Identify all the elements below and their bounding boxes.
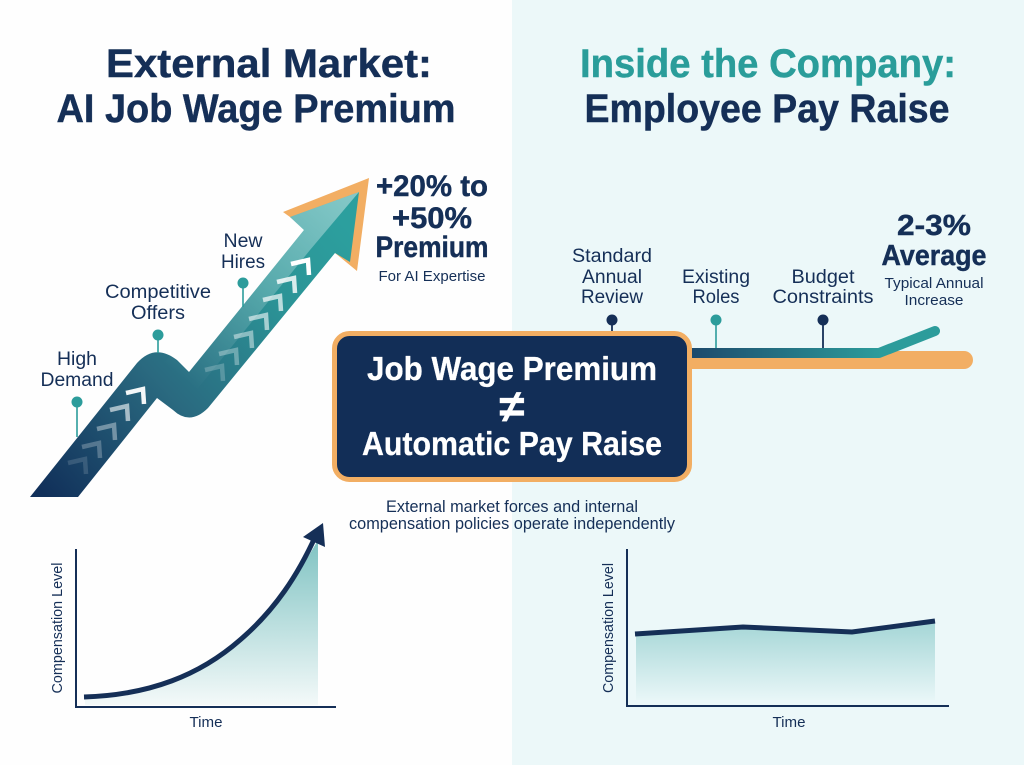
center box: premium is not a raise: Job Wage Premium — [367, 350, 657, 387]
title: external market: External Market: — [106, 42, 432, 86]
panel: inside the company background — [512, 0, 1024, 765]
chart: external compensation curve: Compensation Level — [49, 562, 66, 694]
label: standard annual review: Annual — [582, 267, 642, 288]
callout: premium range: +20% to — [376, 170, 488, 203]
title: inside the company — [580, 42, 956, 131]
title: external market — [56, 42, 456, 131]
callout: premium range: For AI Expertise — [378, 268, 486, 285]
label: standard annual review: Standard — [572, 246, 652, 267]
label: budget constraints — [772, 267, 874, 348]
label: existing roles — [682, 267, 750, 348]
label: standard annual review: Review — [581, 287, 643, 308]
callout: average raise: Average — [882, 240, 986, 272]
center box: premium is not a raise: Automatic Pay Raise — [362, 425, 662, 462]
label: existing roles: Existing — [682, 267, 750, 288]
caption: independent forces: compensation policies operate independently — [349, 515, 676, 533]
label: new hires — [221, 231, 265, 307]
panel: external market background — [0, 0, 512, 765]
label: competitive offers: Offers — [131, 303, 185, 324]
label: new hires: New — [224, 231, 263, 252]
label: high demand — [40, 349, 114, 437]
callout: premium range: +50% — [392, 202, 472, 235]
label: new hires: Hires — [221, 252, 265, 273]
label: existing roles: Roles — [692, 287, 740, 308]
callout: average raise: Typical Annual — [884, 275, 984, 292]
chart: external compensation curve: Time — [190, 715, 222, 731]
chart: internal compensation line: Compensation Level — [600, 563, 617, 693]
label: competitive offers: Competitive — [105, 282, 211, 303]
label: budget constraints: Constraints — [772, 287, 874, 308]
chart: internal compensation line — [600, 549, 949, 731]
callout: average raise — [882, 210, 986, 309]
arrow: rising AI wage premium — [30, 178, 369, 497]
center box: premium is not a raise: ≠ — [499, 380, 525, 432]
title: inside the company: Inside the Company: — [580, 42, 956, 86]
label: high demand: Demand — [40, 370, 114, 391]
callout: premium range: Premium — [376, 231, 488, 264]
title: inside the company: Employee Pay Raise — [584, 87, 950, 131]
caption: independent forces — [349, 498, 676, 533]
callout: average raise: 2-3% — [897, 210, 971, 242]
label: competitive offers — [105, 282, 211, 353]
chart: external compensation curve — [49, 523, 336, 731]
label: budget constraints: Budget — [792, 267, 855, 288]
title: external market: AI Job Wage Premium — [56, 87, 456, 131]
label: standard annual review — [572, 246, 652, 333]
callout: average raise: Increase — [904, 292, 964, 309]
label: high demand: High — [57, 349, 97, 370]
chart: internal compensation line: Time — [772, 715, 806, 731]
callout: premium range — [376, 170, 488, 285]
center box: premium is not a raise — [334, 334, 690, 480]
caption: independent forces: External market forces and internal — [386, 498, 638, 516]
timeline: flat internal pay bar — [680, 331, 964, 360]
